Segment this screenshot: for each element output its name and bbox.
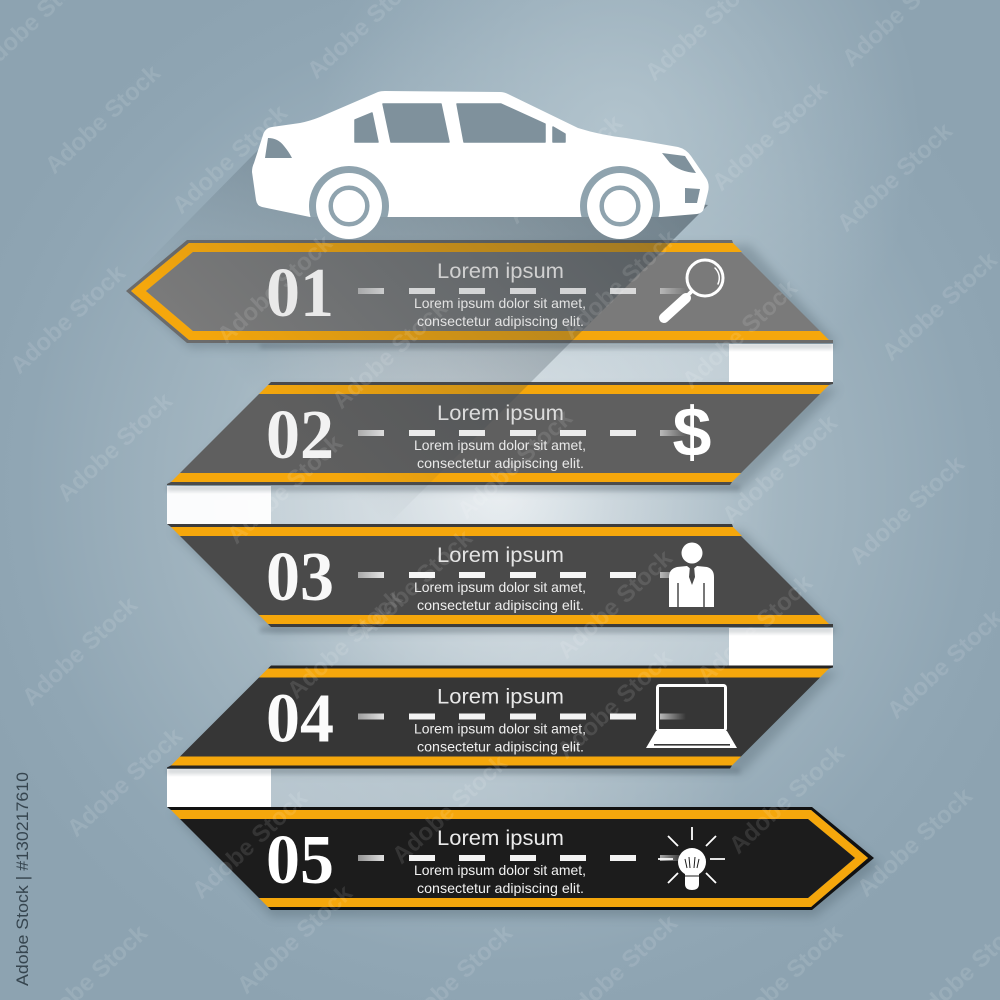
icon: businessman [669, 542, 714, 607]
text block 1: Lorem ipsum dolor sit amet, [414, 295, 586, 311]
watermarks: Adobe Stock [327, 294, 453, 414]
connector: band 2 to band 3 [167, 485, 740, 524]
text block 3: Lorem ipsum dolor sit amet, [414, 579, 586, 595]
panel: band 3 road [167, 524, 833, 627]
watermarks: Adobe Stock [552, 544, 678, 664]
heading 5: Lorem ipsum [437, 827, 564, 850]
watermarks: Adobe Stock [52, 387, 178, 507]
watermarks: Adobe Stock [5, 259, 131, 379]
icon: laptop [646, 686, 737, 748]
watermarks: Adobe Stock [877, 246, 1000, 366]
stock credit: Adobe Stock | #130217610 [13, 772, 32, 986]
car lights and grille [265, 138, 700, 203]
car long shadow [130, 150, 708, 543]
wheel arches [309, 166, 660, 217]
number 04: 04 [266, 680, 334, 758]
watermarks: Adobe Stock [212, 229, 338, 349]
text block 4: Lorem ipsum dolor sit amet, [414, 720, 586, 736]
number 01: 01 [266, 255, 334, 332]
watermarks: Adobe Stock [844, 450, 970, 570]
watermarks: Adobe Stock [387, 749, 513, 869]
watermarks: Adobe Stock [452, 404, 578, 524]
heading 1: Lorem ipsum [437, 260, 564, 283]
car windows [355, 104, 565, 142]
text block 5: consectetur adipiscing elit. [417, 880, 584, 896]
watermarks: Adobe Stock [62, 722, 188, 842]
number 05: 05 [266, 822, 334, 899]
band 4 content [266, 680, 737, 758]
band 5 content [266, 822, 725, 899]
text block 2: consectetur adipiscing elit. [417, 455, 584, 471]
connector: band 1 to band 2 [260, 343, 833, 382]
text block 3 [414, 579, 586, 613]
text block 2 [414, 437, 586, 471]
dashes 3 [358, 572, 686, 578]
watermarks: Adobe Stock [557, 224, 683, 344]
watermarks: Adobe Stock [352, 524, 478, 644]
heading 3: Lorem ipsum [437, 544, 564, 567]
watermarks: Adobe Stock [232, 879, 358, 999]
rear wheel [316, 173, 382, 239]
watermarks: Adobe Stock [717, 409, 843, 529]
panel: band 2 road [167, 382, 833, 485]
front wheel [587, 173, 653, 239]
car body [252, 91, 709, 217]
watermarks: Adobe Stock [502, 109, 628, 229]
icon: magnifying glass [664, 260, 723, 318]
watermarks: Adobe Stock [677, 274, 803, 394]
band 3 content [266, 539, 714, 616]
text block 2: Lorem ipsum dolor sit amet, [414, 437, 586, 453]
connector: band 4 to band 5 [167, 768, 740, 807]
icon: light bulb [658, 827, 725, 890]
panel: band 5 road [167, 807, 874, 910]
text block 1: consectetur adipiscing elit. [417, 313, 584, 329]
dashes 2 [358, 430, 686, 436]
panel: band 4 road [167, 666, 833, 768]
watermarks: Adobe Stock [187, 784, 313, 904]
band 2 content [266, 393, 711, 474]
heading 2: Lorem ipsum [437, 402, 564, 425]
text block 1 [414, 295, 586, 329]
dashes 1 [358, 288, 686, 294]
watermarks: Adobe Stock [724, 739, 850, 859]
watermarks: Adobe Stock [552, 644, 678, 764]
watermarks: Adobe Stock [707, 76, 833, 196]
number 03: 03 [266, 539, 334, 616]
text block 3: consectetur adipiscing elit. [417, 597, 584, 613]
watermarks: Adobe Stock [167, 99, 293, 219]
heading 4: Lorem ipsum [437, 686, 564, 708]
watermarks: Adobe Stock [282, 584, 408, 704]
text block 4: consectetur adipiscing elit. [417, 738, 584, 754]
panel: band 1 road [126, 240, 833, 343]
band 1 content [266, 255, 723, 332]
car illustration [252, 91, 709, 246]
text block 5: Lorem ipsum dolor sit amet, [414, 862, 586, 878]
text block 5 [414, 862, 586, 896]
watermarks: Adobe Stock [17, 591, 143, 711]
dashes 5 [358, 855, 686, 861]
watermarks: Adobe Stock [692, 569, 818, 689]
text block 4 [414, 720, 586, 754]
watermarks: Adobe Stock [222, 429, 348, 549]
icon: dollar sign: $ [673, 393, 711, 471]
watermarks: Adobe Stock [40, 59, 166, 179]
dashes 4 [358, 714, 636, 720]
number 02: 02 [266, 397, 334, 474]
watermarks: Adobe Stock [832, 117, 958, 237]
watermarks: Adobe Stock [852, 782, 978, 902]
connector: band 3 to band 4 [260, 627, 833, 666]
band drop shadows [135, 245, 880, 917]
